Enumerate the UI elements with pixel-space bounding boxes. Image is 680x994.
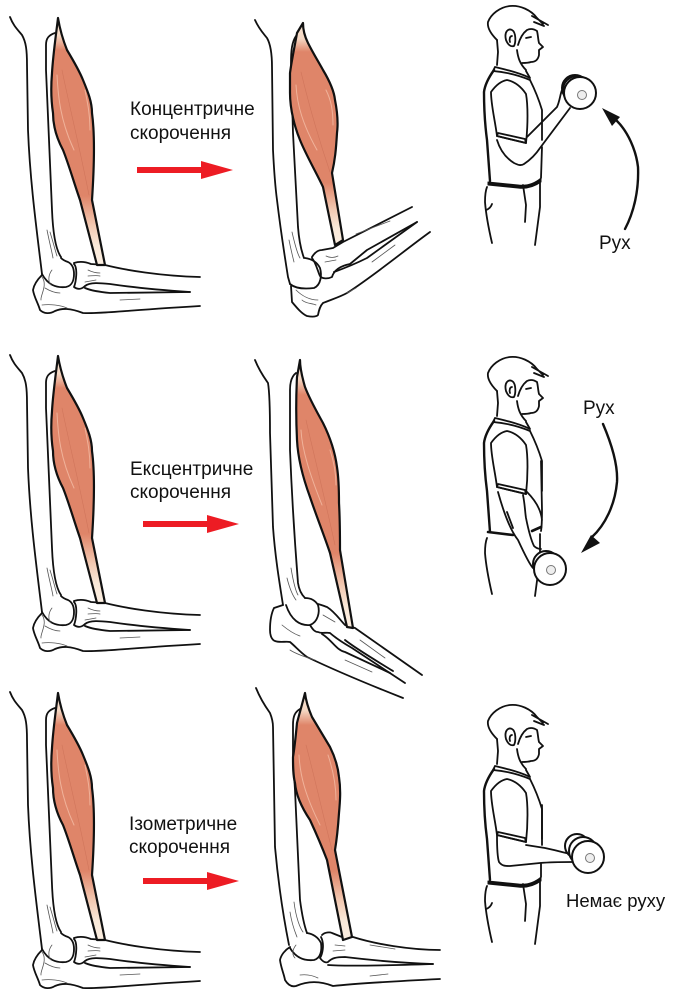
arrow: red arrow concentric	[137, 161, 233, 179]
diagram: arm with flexed elbow and shortened biceps	[255, 20, 430, 317]
panel: eccentric contraction row	[10, 355, 617, 698]
figure: person with dumbbell raised	[484, 6, 596, 245]
diagram: extended arm with lengthened biceps	[255, 360, 422, 698]
label: concentric: скорочення	[130, 123, 231, 144]
belt	[488, 178, 541, 188]
arrow: downward movement	[581, 424, 617, 553]
label: movement: Рух	[599, 233, 631, 254]
label: eccentric: Ексцентричне	[130, 459, 253, 480]
belt segments	[488, 527, 541, 535]
belt	[488, 877, 541, 887]
label: eccentric: скорочення	[130, 482, 231, 503]
panel: isometric contraction row	[10, 688, 666, 988]
label: movement: Рух	[583, 398, 615, 419]
diagram: resting arm, eccentric	[10, 355, 200, 651]
diagram: resting arm, concentric	[10, 17, 200, 313]
diagram: arm with biceps tensed at constant length	[256, 688, 440, 986]
label: isometric: скорочення	[129, 837, 230, 858]
panel: concentric contraction row	[10, 6, 638, 317]
label: no movement: Немає руху	[566, 890, 666, 911]
arrow: red arrow eccentric	[143, 515, 239, 533]
arrow: upward movement	[602, 108, 638, 229]
diagram: resting arm, isometric	[10, 692, 200, 988]
trouser fold	[486, 884, 526, 921]
label: concentric: Концентричне	[130, 99, 255, 120]
trouser fold	[486, 185, 526, 222]
arrow: red arrow isometric	[143, 872, 239, 890]
figure: person holding dumbbell at right angle	[484, 705, 604, 944]
figure: person with dumbbell lowered	[484, 357, 566, 596]
label: isometric: Ізометричне	[129, 814, 237, 835]
